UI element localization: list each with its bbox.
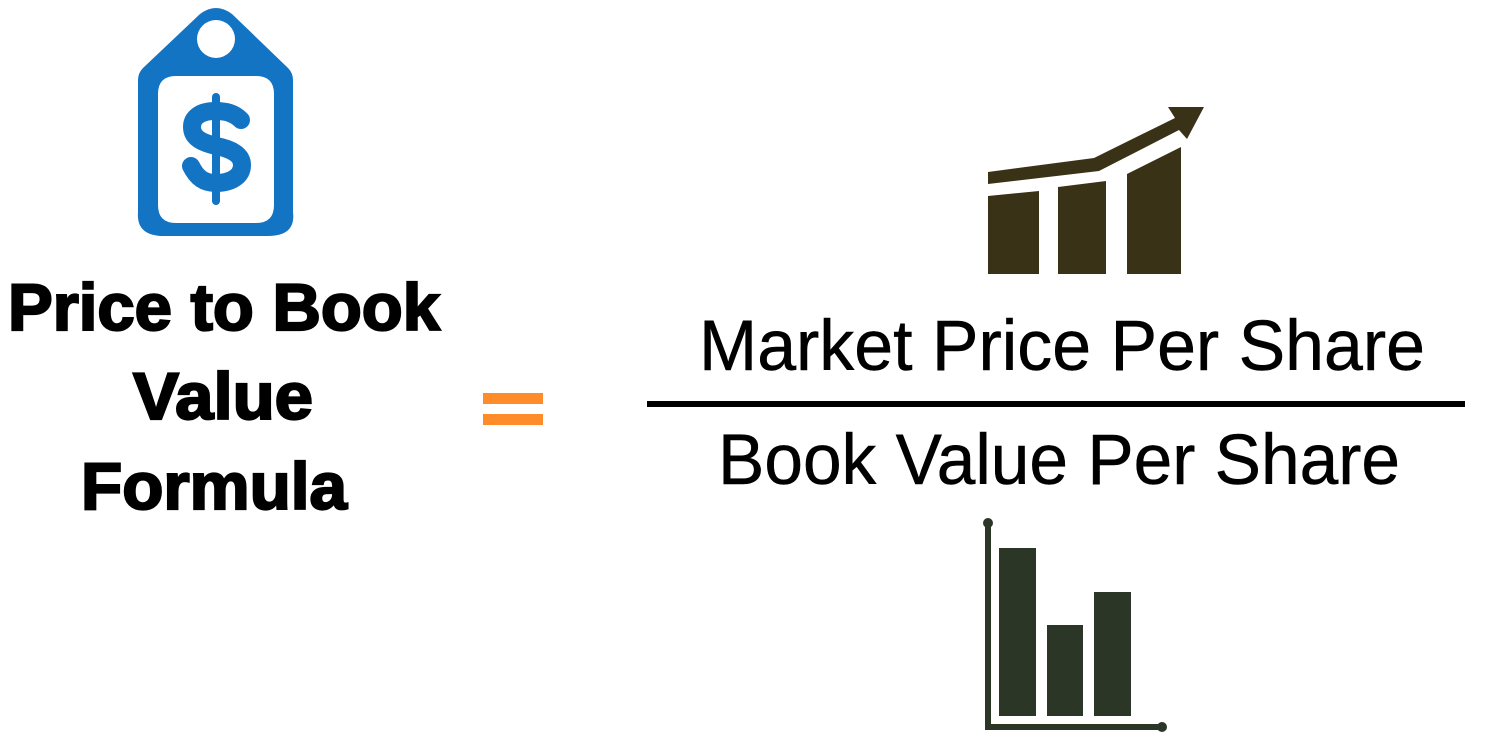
icon: blue price tag with dollar sign	[138, 8, 293, 236]
equals sign	[483, 393, 543, 425]
denominator: Book Value Per Share: Book Value Per Share	[718, 421, 1400, 500]
numerator: Market Price Per Share: Market Price Per Share	[699, 307, 1425, 386]
icon: rising bar chart with arrow	[988, 107, 1204, 274]
title: Price to Book	[8, 270, 440, 344]
title: Formula	[81, 449, 348, 523]
fraction bar	[647, 401, 1465, 407]
title: Value	[133, 359, 313, 433]
title	[8, 270, 440, 523]
icon: bar chart with axes	[983, 518, 1167, 732]
